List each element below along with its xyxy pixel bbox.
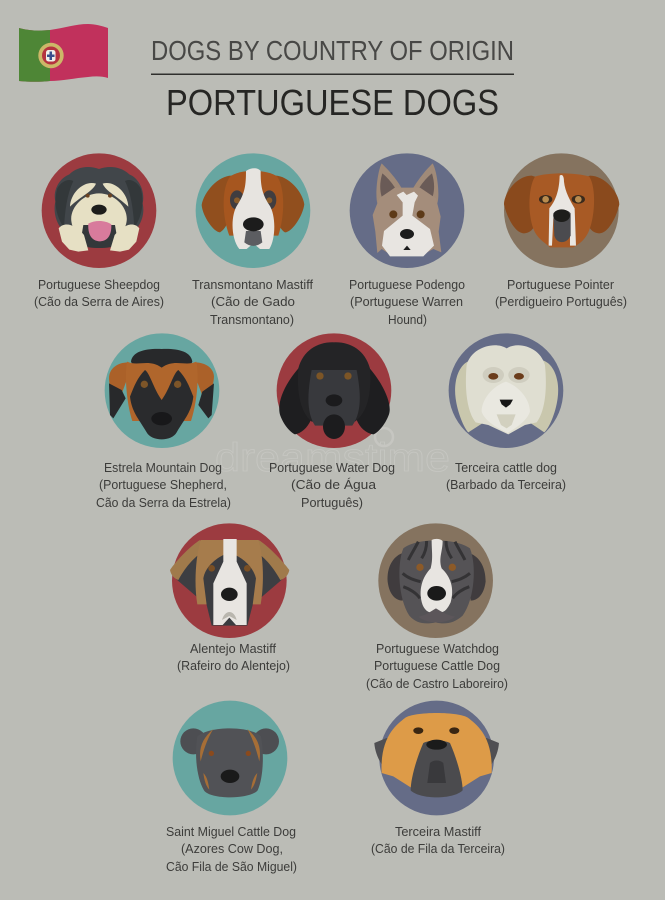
panel: Saint Miguel Cattle Dog bbox=[166, 701, 297, 874]
panel: Portuguese Watchdog bbox=[366, 523, 508, 691]
panel: Portuguese Podengo bbox=[349, 153, 465, 327]
label: Estrela Mountain Dog: Cão da Serra da Estrela) bbox=[96, 496, 231, 510]
label: Transmontano Mastiff bbox=[192, 278, 314, 327]
label: Portuguese Water Dog: Portuguese Water Dog bbox=[269, 461, 395, 475]
label: Terceira Mastiff bbox=[371, 825, 505, 856]
label: Saint Miguel Cattle Dog bbox=[166, 825, 297, 874]
panel: Terceira Mastiff bbox=[371, 701, 505, 856]
label: Portuguese Podengo bbox=[349, 278, 465, 327]
label: Portuguese Pointer: Portuguese Pointer bbox=[507, 278, 614, 292]
label: Portuguese Pointer bbox=[495, 278, 627, 309]
label: Transmontano Mastiff: (Cão de Gado bbox=[211, 295, 295, 309]
panel: Portuguese Sheepdog bbox=[34, 153, 164, 309]
panel: Estrela Mountain Dog bbox=[96, 333, 231, 510]
label: Transmontano Mastiff: Transmontano Mastiff bbox=[192, 278, 314, 292]
label: Portuguese Water Dog: (Cão de Água bbox=[291, 477, 376, 492]
icon: Portuguese Pointer face bbox=[504, 153, 619, 268]
label: Saint Miguel Cattle Dog: (Azores Cow Dog, bbox=[181, 842, 283, 856]
icon: Portuguese Podengo face bbox=[350, 153, 464, 268]
label: Portuguese Pointer: (Perdigueiro Português) bbox=[495, 295, 627, 309]
label: Alentejo Mastiff: Alentejo Mastiff bbox=[190, 642, 277, 656]
label: Portuguese Sheepdog: (Cão da Serra de Aires) bbox=[34, 295, 164, 309]
icon: Portuguese flag bbox=[19, 24, 108, 82]
icon: Saint Miguel Cattle Dog face bbox=[173, 701, 287, 815]
label: Saint Miguel Cattle Dog: Cão Fila de São Miguel) bbox=[166, 860, 297, 874]
label: Estrela Mountain Dog bbox=[96, 461, 231, 510]
title rule bbox=[151, 74, 514, 75]
label: Portuguese Watchdog: Portuguese Cattle Dog bbox=[374, 659, 500, 673]
label: Estrela Mountain Dog: (Portuguese Shepherd, bbox=[99, 478, 227, 492]
icon: Portuguese Water Dog face bbox=[277, 333, 391, 448]
icon: Terceira Mastiff face bbox=[374, 701, 499, 815]
panel: Portuguese Pointer bbox=[495, 153, 627, 309]
label: Portuguese Sheepdog: Portuguese Sheepdog bbox=[38, 278, 160, 292]
icon: Transmontano Mastiff face bbox=[196, 153, 310, 268]
label: Portuguese Podengo: Hound) bbox=[388, 313, 427, 327]
label: Portuguese Water Dog bbox=[269, 461, 395, 510]
label: Terceira cattle dog: Terceira cattle dog bbox=[455, 461, 557, 475]
title: Dogs by country of origin: DOGS BY COUNTRY OF ORIGIN bbox=[151, 35, 514, 66]
icon: Alentejo Mastiff face bbox=[170, 523, 289, 638]
panel: Alentejo Mastiff bbox=[170, 523, 290, 673]
watermark: dreamstime bbox=[215, 436, 450, 480]
label: Saint Miguel Cattle Dog: Saint Miguel Cattle Dog bbox=[166, 825, 296, 839]
icon: Portuguese Watchdog face bbox=[378, 523, 493, 638]
icon: Portuguese Sheepdog face bbox=[42, 153, 156, 268]
label: Portuguese Podengo: Portuguese Podengo bbox=[349, 278, 465, 292]
panel: Terceira cattle dog bbox=[446, 333, 566, 492]
label: Portuguese Sheepdog bbox=[34, 278, 164, 309]
label: Terceira cattle dog bbox=[446, 461, 566, 492]
panel: Portuguese Water Dog bbox=[269, 333, 395, 510]
label: Terceira Mastiff: (Cão de Fila da Terceira) bbox=[371, 842, 505, 856]
label: Portuguese Watchdog bbox=[366, 642, 508, 691]
label: Portuguese Watchdog: Portuguese Watchdog bbox=[376, 642, 499, 656]
label: Portuguese Water Dog: Português) bbox=[301, 496, 363, 510]
label: Portuguese Podengo: (Portuguese Warren bbox=[350, 295, 463, 309]
icon: Estrela Mountain Dog face bbox=[105, 333, 219, 448]
label: Terceira Mastiff: Terceira Mastiff bbox=[395, 825, 482, 839]
heading: Portuguese Dogs: PORTUGUESE DOGS bbox=[166, 82, 499, 123]
panel: Transmontano Mastiff bbox=[192, 153, 314, 327]
label: Portuguese Watchdog: (Cão de Castro Laboreiro) bbox=[366, 677, 508, 691]
label: Transmontano Mastiff: Transmontano) bbox=[210, 313, 294, 327]
icon: Terceira cattle dog face bbox=[449, 333, 563, 448]
label: Alentejo Mastiff bbox=[177, 642, 290, 673]
label: Terceira cattle dog: (Barbado da Terceira) bbox=[446, 478, 566, 492]
label: Estrela Mountain Dog: Estrela Mountain Dog bbox=[104, 461, 222, 475]
label: Alentejo Mastiff: (Rafeiro do Alentejo) bbox=[177, 659, 290, 673]
